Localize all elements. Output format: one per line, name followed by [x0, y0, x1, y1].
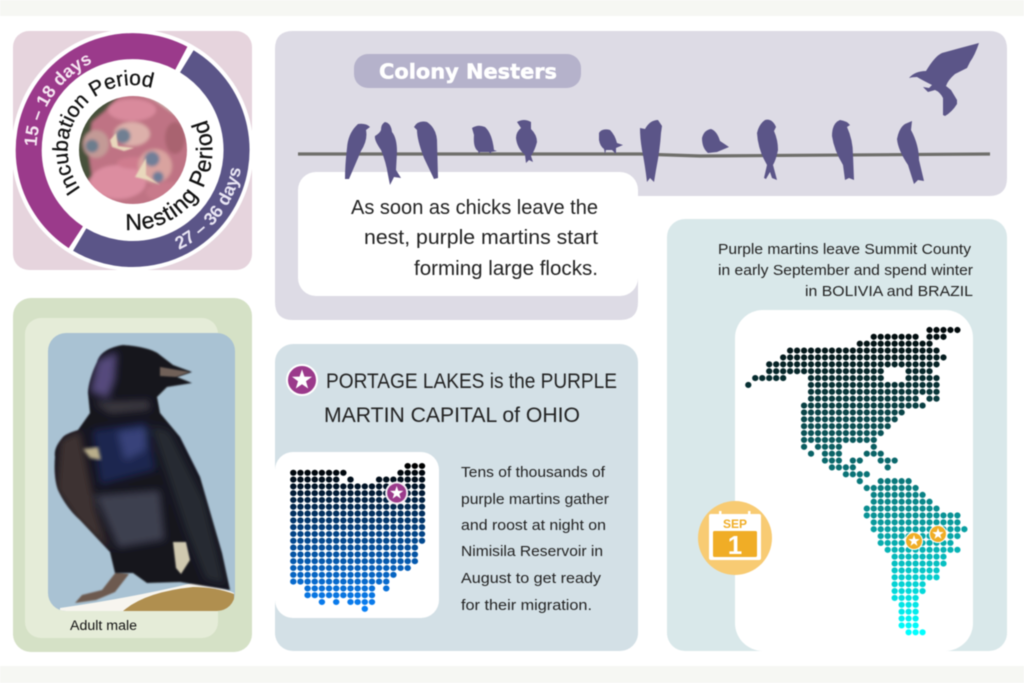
body text: and roost at night on: [461, 517, 606, 534]
flock text: [351, 196, 598, 280]
map card: [735, 310, 973, 651]
map card: [275, 452, 439, 618]
ring backing: [12, 29, 254, 271]
icon: purple star: [287, 365, 317, 395]
panel background: [667, 219, 1007, 651]
inner card: [25, 318, 218, 638]
body text: Nimisila Reservoir in: [461, 543, 603, 560]
label: 15-18 days: 15 – 18 days: [24, 54, 92, 146]
heading text: MARTIN CAPITAL of OHIO: [324, 404, 580, 427]
icon: calendar: SEP: [723, 517, 747, 531]
label: nesting period: Nesting Period: [126, 120, 214, 232]
icon: calendar: [698, 501, 772, 575]
panel background: [13, 298, 252, 652]
panel: adult male photo: [13, 298, 252, 652]
heading text: PORTAGE LAKES is the PURPLE: [326, 370, 617, 393]
panel background: [13, 31, 252, 270]
flock text: As soon as chicks leave the: [351, 196, 598, 219]
migration text: Purple martins leave Summit County: [718, 241, 972, 258]
migration text: in early September and spend winter: [718, 262, 973, 279]
body text: purple martins gather: [461, 491, 609, 508]
body text: August to get ready: [461, 570, 602, 587]
dot map: Americas: [748, 330, 964, 632]
label: 27-36 days: 27 – 36 days: [174, 167, 242, 250]
body text: [461, 464, 609, 614]
wire: [298, 154, 990, 156]
panel: nesting timeline: [12, 30, 252, 270]
body text: Tens of thousands of: [461, 464, 606, 481]
birds on wire: [345, 120, 924, 185]
photo: chicks: [76, 93, 190, 207]
heading: Colony Nesters: [379, 60, 557, 84]
heading text: [324, 370, 617, 427]
heading pill: [354, 54, 581, 88]
marker: Brazil: [930, 526, 946, 542]
panel background: [275, 31, 1007, 320]
flock text: nest, purple martins start: [364, 226, 598, 249]
marker: Portage Lakes: [386, 482, 407, 504]
nesting arc: [80, 61, 237, 254]
bird legs: [75, 572, 129, 603]
label: incubation period: Incubation Period: [51, 69, 155, 196]
panel: Ohio capital: [275, 344, 638, 651]
flock text: forming large flocks.: [414, 257, 598, 280]
dot map: Ohio: [293, 466, 422, 609]
migration text: in BOLIVIA and BRAZIL: [805, 283, 973, 300]
photo: purple martin: [48, 333, 235, 611]
panel: migration: [667, 219, 1007, 651]
flying bird: [909, 43, 979, 116]
body text: for their migration.: [461, 597, 592, 614]
migration text: [718, 241, 973, 300]
caption: Adult male: [70, 618, 137, 633]
icon: calendar: 1: [728, 530, 742, 560]
text card: [298, 172, 638, 296]
marker: Bolivia: [906, 532, 922, 550]
panel: colony nesters: [275, 31, 1007, 320]
bird body: [50, 340, 235, 595]
panel background: [275, 344, 638, 651]
incubation arc: [29, 46, 181, 237]
